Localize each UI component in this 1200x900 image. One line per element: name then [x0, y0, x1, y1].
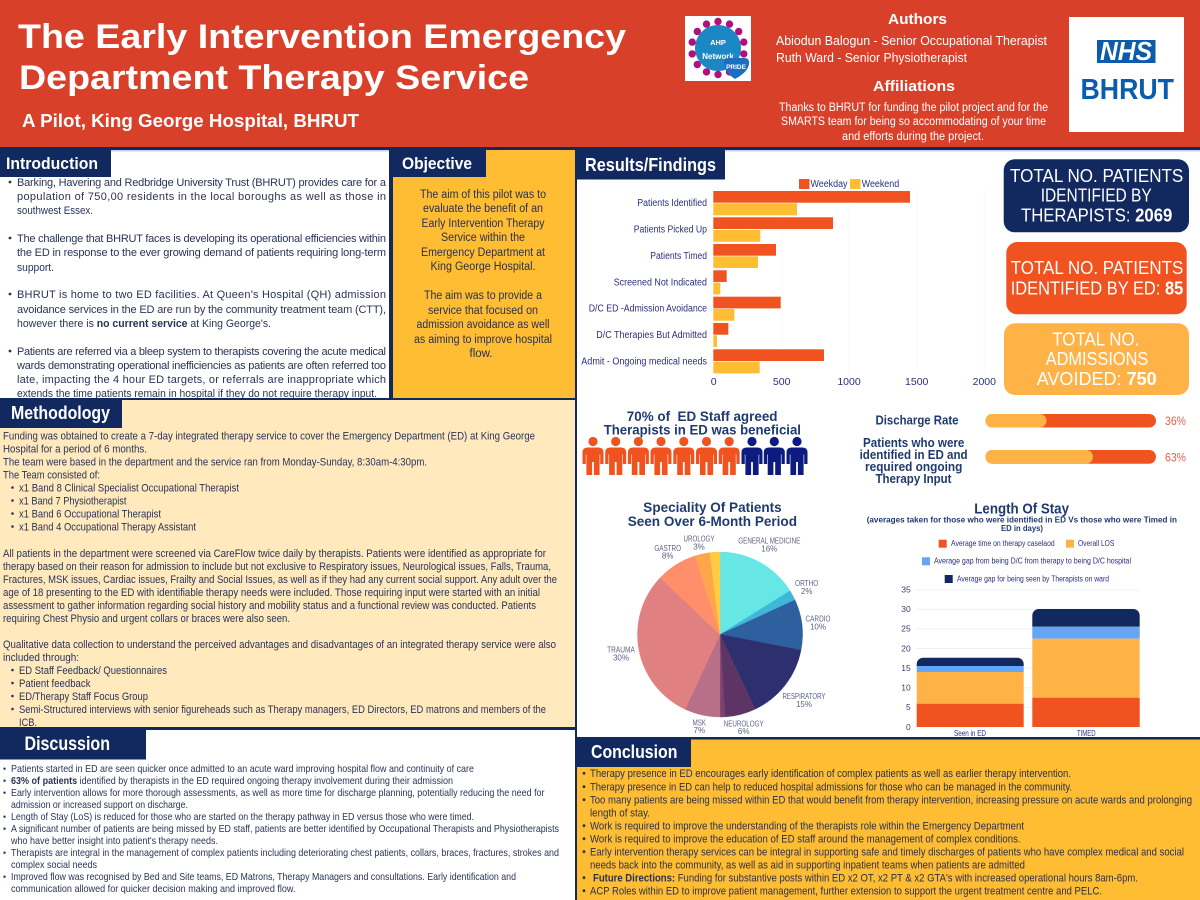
text: conclusion bullets: needs back into the community, as well as aid in supporting inpatient teams when patients are admitted [590, 860, 1025, 872]
authors: Authors [888, 11, 947, 28]
progress bar: discharge rate: Discharge Rate [876, 414, 959, 428]
category labels: Patients Timed [650, 251, 707, 262]
text: objective: evaluate the benefit of an [423, 203, 543, 215]
text: objective [414, 189, 552, 360]
heading: results: Results/Findings [585, 155, 716, 175]
logo: NHS BHRUT [1069, 17, 1184, 132]
text: conclusion bullets: Work is required to improve the understanding of the therapists role within the Emergency Department [590, 820, 1024, 832]
text: methodology: assessment to gather information regarding social history and mobility status and a functional review was conducted. Patients [3, 600, 536, 612]
text: conclusion bullets: Therapy presence in ED can help to reduced hospital admissions for those who can be managed in the community. [590, 782, 1072, 794]
text: methodology [3, 430, 557, 729]
text: discussion bullets: Therapists are integral in the management of complex patients including deteriorating chest patients, collars, braces, fractures, strokes and [11, 847, 559, 859]
weekend bars [713, 203, 797, 373]
chart title: length of stay [867, 500, 1177, 533]
text: methodology: therapy based on their reason for admission to include but not exclusive to Respiratory issues, Neurological issues, Falls, Trauma, [3, 561, 551, 573]
staff agreement heading: Therapists in ED was beneficial [604, 422, 801, 438]
value axis: 2000 [973, 376, 996, 388]
pie labels: 3% [693, 543, 705, 552]
text: discussion bullets: 63% of patients identified by therapists in the ED required ongoing therapy involvement during their admission [11, 775, 453, 787]
text: conclusion bullets: Work is required to improve the education of ED staff around the management of complex conditions. [590, 834, 1021, 846]
text: methodology: Qualitative data collection to understand the perceived advantages and disadvantages of an integrated therapy service were also [3, 639, 556, 651]
text: methodology: ICB. [19, 717, 37, 729]
text: introduction bullets: support. [17, 262, 54, 274]
text: objective: as aiming to improve hospital [414, 334, 552, 346]
text: objective: Early Intervention Therapy [422, 218, 545, 230]
text: methodology: Semi-Structured interviews with senior figureheads such as Therapy managers, ED Directors, ED matrons and members of the [19, 704, 546, 716]
heading: conclusion: Conclusion [591, 742, 677, 762]
category labels: Patients Identified [637, 198, 707, 209]
header banner [0, 0, 1200, 150]
title: Department Therapy Service [19, 59, 529, 97]
pie labels: GENERAL MEDICINE [738, 536, 800, 545]
text: methodology: The team were based in the department and the service ran from Monday-Sunday, 8:30am-4:30pm. [3, 456, 427, 468]
text: discussion bullets: complex social needs [11, 859, 97, 871]
heading: objective [391, 150, 486, 177]
title: The Early Intervention Emergency [18, 18, 626, 56]
text: introduction bullets: extends the time patients remain in hospital if they do not require therapy input. [17, 388, 377, 400]
pie labels: 30% [613, 654, 629, 663]
pie labels: CARDIO [806, 614, 830, 623]
logo: AHP Network Pride: Network [702, 52, 734, 61]
text: discussion bullets: Patients started in ED are seen quicker once admitted to an acute ward improving hospital flow and continuity of care [11, 763, 474, 775]
category labels: D/C ED -Admission Avoidance [589, 304, 707, 315]
progress bar: ongoing therapy input: 63% [1165, 450, 1186, 464]
axis values: 10 [901, 682, 911, 692]
pie labels: 16% [761, 544, 777, 553]
pie labels: 7% [694, 726, 705, 735]
weekday bars [713, 191, 910, 361]
pie labels: NEUROLOGY [724, 719, 764, 728]
heading: discussion [0, 730, 146, 760]
authors [776, 11, 1047, 65]
axis values: 5 [906, 702, 911, 712]
text: methodology: x1 Band 8 Clinical Specialist Occupational Therapist [19, 482, 239, 494]
text: conclusion bullets: ACP Roles within ED to improve patient management, further extension to support the urgent treatment centre and PELC. [590, 886, 1102, 898]
stat card: patients identified by ED [1006, 242, 1187, 314]
progress bar: ongoing therapy input: required ongoing [865, 460, 962, 474]
affiliations: Thanks to BHRUT for funding the pilot project and for the [779, 102, 1048, 114]
text: discussion bullets: who have better insight into patient's therapy needs. [10, 835, 218, 847]
text: methodology: ED/Therapy Staff Focus Group [19, 691, 148, 703]
pie chart title: Seen Over 6-Month Period [628, 513, 797, 529]
chart title: length of stay: Length Of Stay [974, 500, 1070, 518]
text: methodology: x1 Band 7 Physiotherapist [19, 496, 126, 508]
stacked bar: seen in ED [917, 658, 1024, 727]
logo: AHP Network Pride [685, 16, 751, 81]
text: discussion bullets: admission or increased support on discharge. [11, 799, 188, 811]
panel: introduction [0, 150, 390, 400]
text: objective: service that focused on [428, 305, 538, 317]
text: discussion bullets: A significant number of patients are being missed by ED staff, patients are better identified by Occupational Therapists and Physiotherapists [11, 823, 559, 835]
pie labels [607, 535, 830, 736]
axis values: 15 [901, 663, 911, 673]
chart legend: Weekend [862, 179, 899, 190]
axis values: 30 [901, 604, 911, 614]
pie chart title [628, 499, 797, 529]
heading: methodology: Methodology [11, 403, 110, 423]
text: introduction bullets: late, impacting the 4 hour ED targets, or referrals are inappropriate which [17, 374, 386, 386]
authors: Ruth Ward - Senior Physiotherapist [776, 50, 967, 65]
heading: conclusion [575, 737, 691, 767]
stat card: patients identified by therapists [1004, 159, 1189, 232]
title [18, 18, 626, 97]
text: discussion bullets [3, 763, 559, 895]
text: objective: Service within the [441, 232, 525, 244]
chart legend: Weekday [810, 179, 848, 190]
pie labels: 2% [801, 587, 812, 596]
value axis: 0 [711, 376, 717, 388]
category labels: Seen in ED [954, 729, 986, 738]
text: objective: admission avoidance as well [416, 319, 550, 331]
panel: conclusion [575, 737, 1200, 900]
panel: results and findings [575, 150, 1200, 738]
text: introduction bullets: however there is no current service at King George's. [17, 318, 271, 330]
text: objective: The aim was to provide a [424, 290, 543, 302]
chart legend [799, 179, 899, 190]
stat card: patients identified by ED: IDENTIFIED BY ED: 85 [1011, 278, 1183, 298]
category labels: TIMED [1077, 729, 1096, 738]
pie slices [637, 552, 803, 717]
text: introduction bullets: southwest Essex. [17, 205, 93, 217]
axis values: 0 [906, 722, 911, 732]
progress bar: ongoing therapy input: identified in ED and [860, 448, 968, 462]
heading: discussion: Discussion [24, 734, 110, 755]
logo: AHP Network Pride: AHP [710, 38, 726, 47]
text: introduction bullets: Barking, Havering and Redbridge University Trust (BHRUT) provides care for a [17, 177, 387, 189]
staff agreement heading [604, 409, 801, 438]
pie chart title: Speciality Of Patients [643, 499, 782, 515]
staff agreement heading: 70% of ED Staff agreed [627, 409, 778, 424]
panel: methodology [0, 398, 576, 730]
affiliations: SMARTS team for being so accommodating of your time [781, 116, 1046, 128]
text: methodology: x1 Band 6 Occupational Therapist [19, 508, 161, 520]
text: discussion bullets: communication allowed for quicker decision making and improved flow. [11, 883, 296, 895]
value axis: 500 [773, 376, 791, 388]
category labels: Screened Not Indicated [614, 277, 707, 288]
text: conclusion bullets: Therapy presence in ED encourages early identification of complex patients as well as earlier therapy intervention. [590, 768, 1071, 780]
value axis [711, 376, 996, 388]
pie labels: ORTHO [795, 579, 818, 588]
category labels [581, 198, 707, 368]
panel: discussion [0, 730, 575, 900]
pie chart: speciality of patients [607, 499, 830, 736]
text: objective: The aim of this pilot was to [420, 189, 546, 201]
stacked bar chart: length of stay [867, 500, 1177, 738]
chart legend: length of stay [922, 539, 1131, 583]
text: methodology: x1 Band 4 Occupational Therapy Assistant [19, 522, 196, 534]
text: conclusion bullets [583, 768, 1192, 898]
text: introduction bullets: wards demonstrating operational inefficiencies as patients are often referred too [16, 360, 386, 372]
stat card: admissions avoided: AVOIDED: 750 [1037, 369, 1157, 389]
panel: objective [389, 150, 575, 398]
category labels: D/C Therapies But Admitted [596, 330, 707, 341]
text: introduction bullets [9, 177, 387, 400]
stat card: admissions avoided: ADMISSIONS [1046, 349, 1148, 369]
stat card: patients identified by ED: TOTAL NO. PATIENTS [1011, 258, 1183, 278]
progress bar: ongoing therapy input: Therapy Input [876, 472, 952, 486]
stat card: patients identified by therapists: TOTAL NO. PATIENTS [1010, 166, 1183, 186]
bar chart: weekday versus weekend [581, 179, 996, 388]
progress bar: discharge rate: 36% [1165, 414, 1186, 428]
stat card: patients identified by therapists: IDENTIFIED BY [1041, 186, 1152, 206]
affiliations: Affiliations [873, 78, 955, 95]
text: objective: King George Hospital. [430, 261, 536, 273]
pictogram: 7 of 10 staff agreed [582, 437, 808, 475]
pie labels: UROLOGY [684, 535, 715, 544]
chart legend: length of stay: Overall LOS [1078, 539, 1114, 548]
text: methodology: Funding was obtained to create a 7-day integrated therapy service to cover the Emergency Department (ED) at King George [3, 430, 535, 442]
text: methodology: age of 18 presenting to the ED with identifiable therapy needs were included. Those requiring input were started with an initial [3, 587, 540, 599]
affiliations: and efforts during the project. [842, 131, 984, 143]
chart legend: length of stay: Average gap from being D/C from therapy to being D/C hospital [934, 557, 1131, 566]
stat card: patients identified by therapists: THERAPISTS: 2069 [1021, 206, 1172, 226]
heading: objective: Objective [402, 154, 472, 173]
pie labels: MSK [693, 718, 706, 727]
text: discussion bullets: Length of Stay (LoS) is reduced for those who are started on the therapy pathway in ED versus those who were timed. [11, 811, 474, 823]
logo: NHS BHRUT: NHS [1100, 36, 1153, 66]
text: methodology: ED Staff Feedback/ Questionnaires [19, 665, 167, 677]
axis values: 35 [901, 584, 911, 594]
text: introduction bullets: The challenge that BHRUT faces is developing its operational efficiencies within [17, 233, 386, 245]
text: introduction bullets: avoidance services in the ED are run by the community treatment team (CTT), [17, 304, 386, 316]
pie labels: TRAUMA [607, 646, 635, 655]
text: conclusion bullets: length of stay. [590, 808, 650, 820]
text: discussion bullets: Early intervention allows for more thorough assessments, as well as more time for discharge planning, potentially reducing the need for [11, 787, 545, 799]
progress bar: ongoing therapy input [860, 436, 1186, 486]
value axis: 1000 [837, 376, 861, 388]
logo: NHS BHRUT: BHRUT [1080, 74, 1174, 106]
heading: introduction: Introduction [6, 154, 98, 173]
text: introduction bullets: population of 750,00 residents in the local boroughs as well as those in [17, 191, 386, 203]
text: conclusion bullets: Future Directions: Funding for substantive posts within ED x2 OT, x2 PT & x2 GTA's with increased operational hours 8am-6pm. [593, 872, 1138, 884]
text: introduction bullets: the ED in response to the ever growing demand of patients requiring long-term [17, 247, 386, 259]
progress bar: ongoing therapy input: Patients who were [863, 436, 964, 450]
axis values [901, 584, 911, 732]
text: methodology: Hospital for a period of 6 months. [3, 444, 147, 456]
text: objective: flow. [470, 348, 492, 360]
pie labels: 6% [738, 727, 749, 736]
affiliations [779, 78, 1048, 143]
pie labels: RESPIRATORY [782, 692, 826, 701]
pie labels: 10% [810, 622, 826, 631]
stat card: admissions avoided: TOTAL NO. [1052, 330, 1139, 350]
text: methodology: requiring Chest Physio and urgent collars or braces were also seen. [3, 613, 290, 625]
chart title: length of stay: (averages taken for those who were identified in ED Vs those who were Timed in [867, 514, 1177, 524]
chart legend: length of stay: Average time on therapy caselaod [951, 539, 1055, 548]
stat card: admissions avoided [1004, 323, 1189, 395]
heading: results [575, 150, 725, 180]
chart title: length of stay: ED in days) [1001, 523, 1043, 533]
pie labels: GASTRO [654, 544, 681, 553]
text: methodology: Patient feedback [19, 678, 91, 690]
stacked bar: timed [1032, 609, 1140, 727]
heading: methodology [0, 400, 122, 428]
axis values: 25 [901, 624, 911, 634]
category labels [954, 729, 1096, 738]
subtitle: A Pilot, King George Hospital, BHRUT [22, 111, 359, 131]
text: discussion bullets: Improved flow was recognised by Bed and Site teams, ED Matrons, Therapy Managers and consultations. Early identification and [11, 871, 516, 883]
category labels: Patients Picked Up [634, 224, 707, 236]
text: introduction bullets: BHRUT is home to two ED facilities. At Queen's Hospital (QH) admission [17, 289, 386, 301]
axis values: 20 [901, 643, 911, 653]
text: methodology: included through: [3, 652, 79, 664]
progress bar: discharge rate [876, 414, 1186, 428]
text: methodology: All patients in the department were screened via CareFlow twice daily by therapists. Patients were identified as appropriate for [3, 548, 546, 560]
value axis: 1500 [905, 376, 929, 388]
heading: introduction [0, 150, 111, 177]
category labels: Admit - Ongoing medical needs [581, 356, 707, 368]
pie labels: 15% [796, 700, 812, 709]
text: objective: Emergency Department at [421, 247, 546, 259]
text: introduction bullets: Patients are referred via a bleep system to therapists covering the acute medical [17, 346, 386, 358]
pie labels: 8% [662, 552, 673, 561]
text: methodology: Fractures, MSK issues, Cardiac issues, Frailty and Social Issues, as well as if they had any current social support. Any adult over the [3, 574, 557, 586]
chart legend: length of stay: Average gap for being seen by Therapists on ward [957, 574, 1109, 583]
authors: Abiodun Balogun - Senior Occupational Therapist [776, 33, 1047, 48]
text: methodology: The Team consisted of: [3, 470, 100, 482]
logo: AHP Network Pride: PRIDE [726, 64, 747, 71]
